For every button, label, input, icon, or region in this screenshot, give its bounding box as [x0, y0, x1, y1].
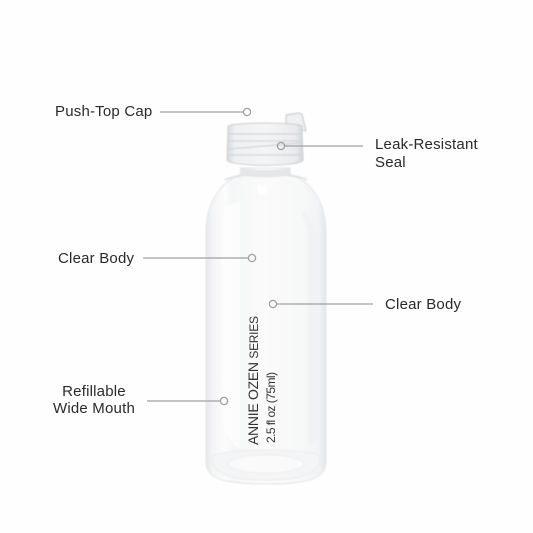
label: refillable wide mouth: Refillable — [62, 383, 126, 400]
label: clear body right: Clear Body — [385, 296, 461, 313]
volume: 2.5 fl oz (75ml) — [264, 372, 278, 443]
callout marker: refillable wide mouth — [147, 397, 228, 405]
label: refillable wide mouth — [53, 383, 135, 417]
label: leak-resistant seal — [375, 136, 478, 171]
label: refillable wide mouth: Wide Mouth — [53, 400, 135, 417]
series name: ANNIE OZEN SERIES — [245, 316, 261, 445]
callout marker: leak-resistant seal — [277, 142, 363, 150]
callout marker: clear body right — [269, 300, 373, 308]
label: push-top cap: Push-Top Cap — [55, 103, 152, 120]
label: leak-resistant seal: Leak-Resistant — [375, 136, 478, 153]
label: leak-resistant seal: Seal — [375, 154, 406, 171]
bottle body — [206, 168, 326, 484]
callout marker: clear body left — [143, 254, 256, 262]
flip cap — [227, 113, 306, 177]
label: clear body left: Clear Body — [58, 250, 134, 267]
callout marker: push-top cap — [160, 108, 251, 116]
